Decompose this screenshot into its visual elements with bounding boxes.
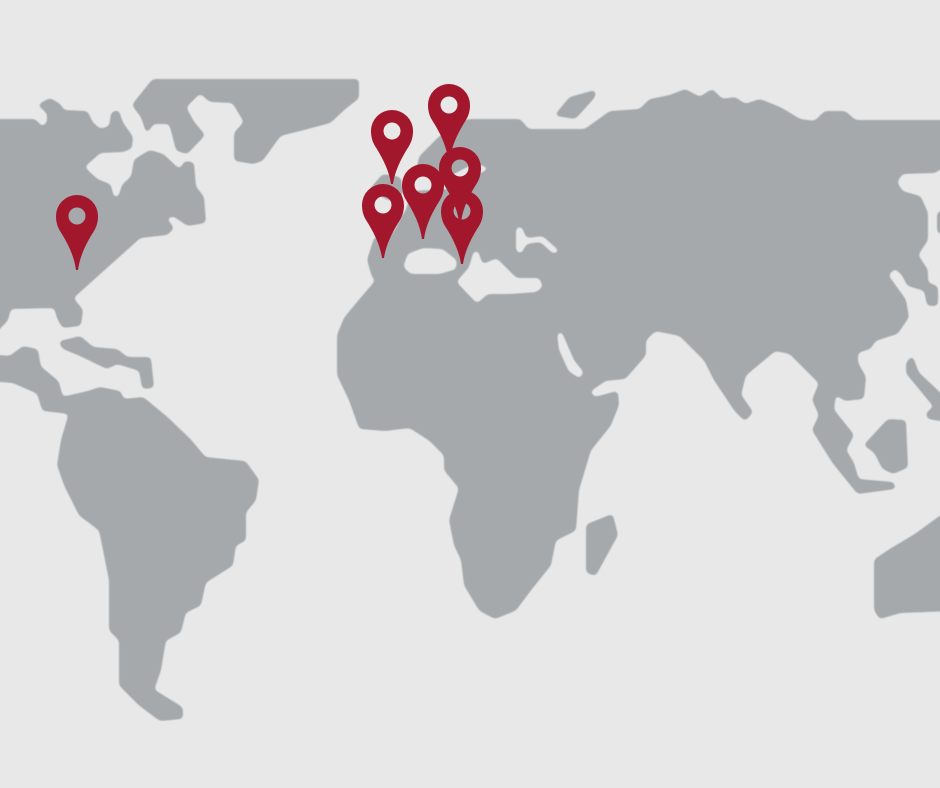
pin: North America [56, 195, 98, 270]
pin: Central Europe [402, 164, 444, 239]
pin: Western Europe [362, 184, 404, 258]
landmass: North America [0, 99, 205, 340]
pin: Eastern Europe north [439, 147, 481, 222]
landmass: Svalbard islands [556, 91, 595, 118]
landmass: Caribbean islands [60, 337, 153, 388]
pin: Eastern Europe south [441, 190, 483, 264]
landmass: Greenland [133, 80, 358, 163]
pin: Britain [371, 110, 413, 184]
location pins [56, 84, 483, 270]
landmass: Central and South America [0, 347, 258, 720]
landmass: Borneo [865, 420, 907, 473]
landmass: Australia [875, 508, 940, 618]
landmass: Britain [370, 175, 402, 200]
landmass: Madagascar [587, 515, 617, 575]
landmass: Philippines [907, 357, 940, 422]
landmass: Japan [938, 208, 940, 236]
pin: Scandinavia [428, 84, 470, 159]
landmass: Eurasia and Africa [338, 90, 940, 618]
